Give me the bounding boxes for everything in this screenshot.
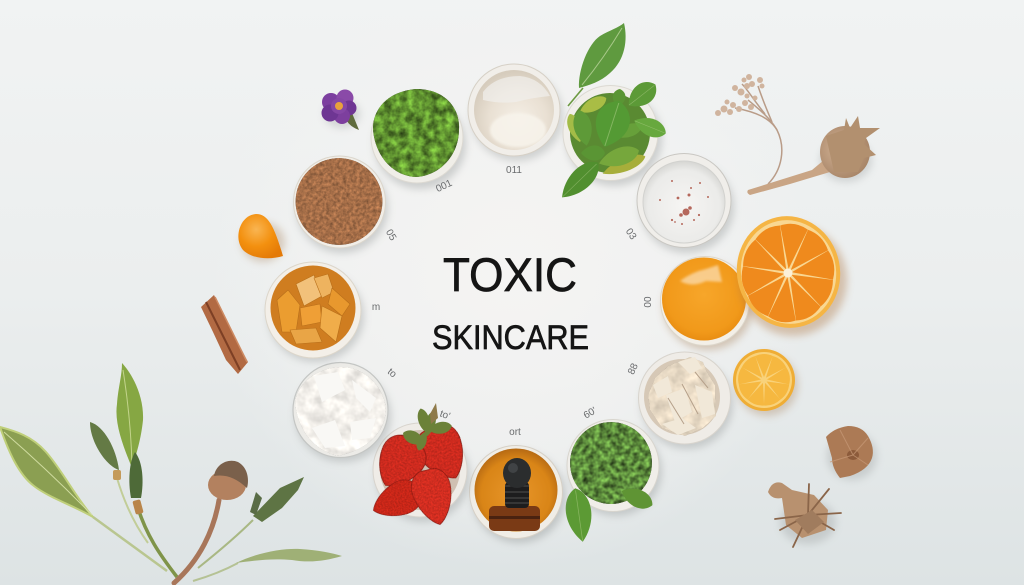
title: TOXIC SKINCARE: SKINCARE — [432, 319, 589, 357]
bowl: green pellets — [563, 420, 662, 543]
number label: 001 — [434, 178, 454, 195]
plant: wide leaf with stem — [0, 427, 167, 571]
icon: purple flower — [322, 90, 360, 130]
number label: 88 — [626, 361, 641, 377]
plant: feathery sprig — [198, 477, 304, 568]
title: TOXIC SKINCARE: TOXIC — [443, 248, 577, 301]
number label: to — [385, 366, 399, 381]
dropper bottle — [489, 458, 540, 531]
bowl: amber honey gel — [660, 256, 753, 350]
number label: 60' — [582, 405, 599, 421]
number label: 03 — [623, 227, 639, 242]
slice: dried lemon — [733, 349, 798, 416]
bowl: strawberries — [366, 403, 476, 529]
bowl: green leaves — [555, 76, 669, 205]
icon: dried seed pod with stem — [747, 116, 880, 195]
title: TOXIC SKINCARE — [432, 248, 589, 357]
bowl: clear liquid — [468, 64, 563, 161]
number label: 05 — [383, 228, 398, 243]
plant: seed spikes and stems — [90, 422, 177, 577]
number label: 011 — [506, 165, 522, 176]
number label: m — [372, 302, 380, 313]
bowl: white flakes — [638, 352, 733, 449]
icon: cinnamon stick — [201, 295, 248, 374]
bowl: amber oil with dark dropper bottle — [470, 446, 566, 543]
bowl: clear serum with pink flecks — [637, 154, 734, 253]
icon: dried flower sprig — [715, 74, 782, 184]
plant: low slim leaf — [193, 549, 342, 581]
bowl: white powder — [293, 362, 391, 462]
leaf: large basil above bowl — [568, 23, 626, 106]
plant: acorn-capped mushroom — [174, 461, 248, 583]
icon: brown seed pod — [826, 426, 877, 480]
bowl: green moss powder — [371, 89, 466, 189]
icon: spiky dried pod — [768, 482, 841, 547]
number label: ort — [509, 427, 521, 438]
number label: 00 — [643, 296, 654, 308]
bowl: amber chips — [265, 262, 364, 362]
plant: narrow upright leaf — [116, 363, 143, 468]
slice: orange — [726, 207, 851, 337]
icon: orange drop — [238, 214, 285, 262]
number label: to' — [438, 409, 452, 422]
bowl: brown powder — [294, 156, 388, 253]
